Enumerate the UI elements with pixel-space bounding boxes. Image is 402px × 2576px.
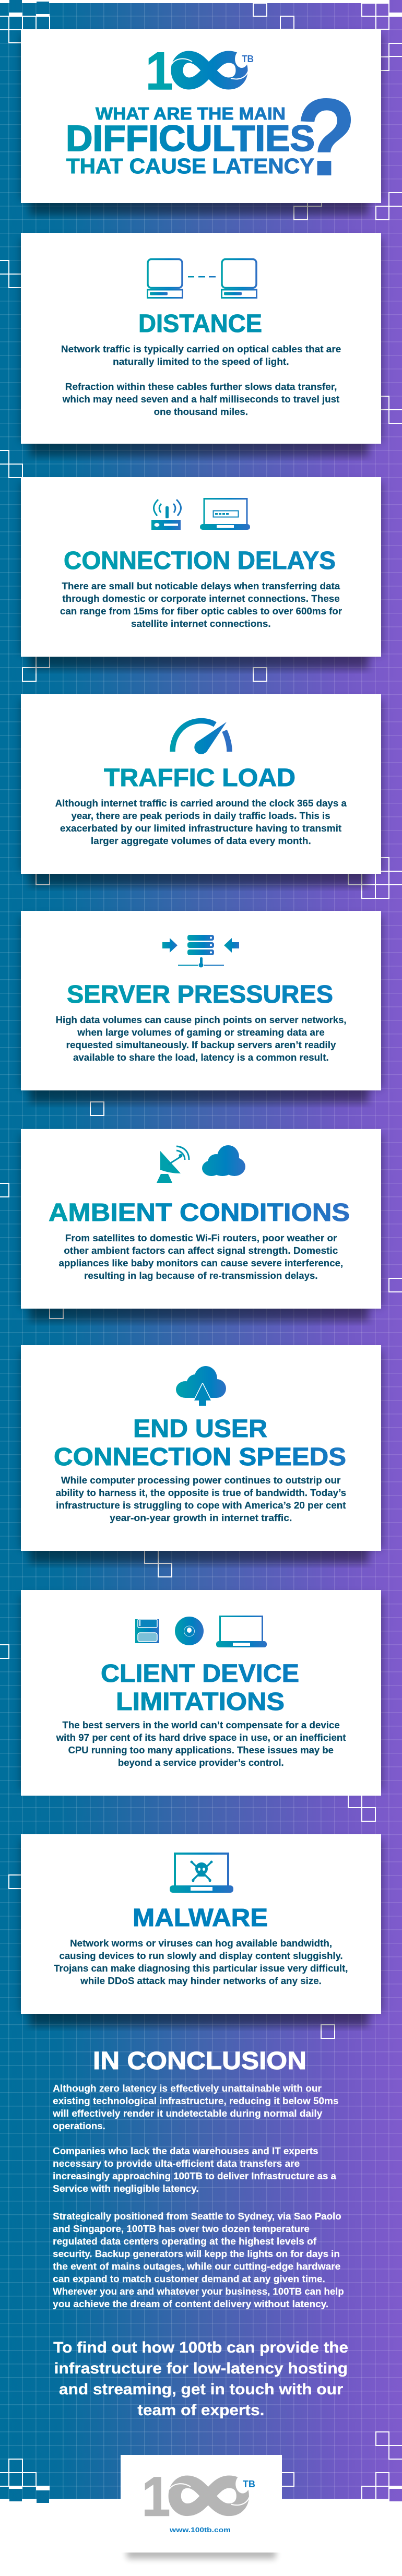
text: distance body: naturally limited to the speed of light. (113, 356, 289, 367)
panel: connection delays (21, 477, 381, 657)
text: distance body: Network traffic is typically carried on optical cables that are (61, 343, 341, 354)
text: server pressures body: High data volumes can cause pinch points on server networks, (56, 1014, 347, 1025)
text: distance body: which may need seven and a half milliseconds to travel just (62, 394, 339, 405)
text: conclusion paragraph two: necessary to provide ulta-efficient data transfers are (53, 2158, 300, 2169)
heading: main title: WHAT ARE THE MAIN (96, 104, 286, 124)
text: conclusion paragraph one: operations. (53, 2120, 105, 2131)
text: end user body: While computer processing power continues to outstrip our (61, 1475, 340, 1486)
text: conclusion paragraph three: the event of mains outages, while our cutting-edge hardware (53, 2261, 340, 2272)
text: end user body: infrastructure is struggling to cope with America’s 20 per cent (56, 1500, 346, 1511)
text: conclusion paragraph three: you achieve the dream of content delivery without latency. (53, 2298, 328, 2309)
text: ambient conditions body: appliances like baby monitors can cause severe interference, (58, 1257, 343, 1268)
panel: distance (21, 233, 381, 444)
text: conclusion paragraph one: Although zero latency is effectively unattainable with our (53, 2083, 322, 2094)
text: client device body: CPU running too many applications. These issues may be (68, 1744, 334, 1755)
text: connection delays body: can range from 15ms for fiber optic cables to over 600ms for (60, 606, 342, 616)
text: ambient conditions body: From satellites to domestic Wi-Fi routers, poor weather or (65, 1232, 337, 1243)
logo: 100TB: 1 (146, 41, 173, 101)
icon: cloud upload (176, 1366, 226, 1406)
heading: main title: DIFFICULTIES (66, 118, 315, 159)
text: connection delays body: There are small but noticable delays when transferring data (62, 580, 340, 591)
panel: traffic load (21, 694, 381, 874)
heading: connection delays: CONNECTION DELAYS (64, 547, 336, 575)
text: ambient conditions body (58, 1232, 343, 1281)
text: client device body: beyond a service provider’s control. (118, 1757, 284, 1768)
text: client device body: The best servers in the world can’t compensate for a device (62, 1719, 340, 1730)
logo: 100TB grey (142, 2465, 255, 2528)
text: distance body: Refraction within these cables further slows data transfer, (65, 381, 337, 392)
heading: server pressures: SERVER PRESSURES (67, 981, 333, 1008)
heading: malware: MALWARE (133, 1904, 268, 1932)
heading: end user connection speeds (54, 1415, 346, 1471)
panel: client device limitations (21, 1590, 381, 1796)
text: connection delays body: through domestic or corporate internet connections. These (62, 593, 340, 604)
icon: router (151, 500, 181, 530)
icon: laptop (200, 499, 250, 530)
text: connection delays body: satellite internet connections. (131, 618, 271, 629)
heading: client device limitations: CLIENT DEVICE (101, 1660, 299, 1688)
icon: compact disc (175, 1617, 204, 1645)
text: website address: www.100tb.com (169, 2526, 231, 2534)
icon: satellite dish (157, 1146, 189, 1183)
panel: server pressures (21, 911, 381, 1090)
text: distance body (61, 343, 341, 417)
logo: 100TB grey: 1 (142, 2465, 170, 2528)
text: ambient conditions body: other ambient factors can affect signal strength. Domestic (64, 1245, 338, 1256)
text: traffic load body: Although internet traffic is carried around the clock 365 days a (55, 798, 347, 809)
text: end user body: year-on-year growth in internet traffic. (110, 1512, 292, 1523)
text: conclusion paragraph three: security. Backup generators will kepp the lights on for days in (53, 2248, 340, 2259)
callout: contact call to action: team of experts. (137, 2402, 264, 2419)
panel: footer logo card (121, 2455, 282, 2553)
text: server pressures body: available to share the load, latency is a common result. (73, 1052, 329, 1063)
text: conclusion paragraph one: existing technological infrastructure, reducing it below 50ms (53, 2095, 338, 2106)
heading: end user connection speeds: CONNECTION SPEEDS (54, 1443, 346, 1471)
text: conclusion paragraph three: Strategically positioned from Seattle to Sydney, via Sao Paolo (53, 2211, 341, 2222)
text: malware body: while DDoS attack may hinder networks of any size. (80, 1975, 322, 1986)
panel: ambient conditions (21, 1129, 381, 1309)
text: conclusion paragraph two: increasingly approaching 100TB to deliver Infrastructure as a (53, 2170, 337, 2181)
text: traffic load body (55, 798, 347, 846)
heading: traffic load: TRAFFIC LOAD (104, 764, 295, 792)
panel: end user connection speeds (21, 1345, 381, 1551)
text: malware body (54, 1938, 348, 1986)
icon: cloud (202, 1145, 245, 1176)
text: traffic load body: year, there are peak periods in daily traffic loads. This is (71, 810, 330, 821)
heading: end user connection speeds: END USER (133, 1415, 267, 1443)
icon: floppy disk (135, 1619, 159, 1643)
heading: client device limitations: LIMITATIONS (116, 1688, 285, 1716)
text: conclusion paragraph two (53, 2145, 337, 2194)
logo: 100TB (146, 41, 254, 101)
text: server pressures body (56, 1014, 347, 1063)
text: conclusion paragraph three: and Singapore, 100TB has over two dozen temperature (53, 2223, 310, 2234)
text: conclusion paragraph three: Wherever you are and whatever your business, 100TB can help (53, 2286, 344, 2297)
text: malware body: Trojans can make diagnosing this particular issue very difficult, (54, 1963, 348, 1974)
text: server pressures body: requested simultaneously. If backup servers aren’t readily (66, 1039, 336, 1050)
text: conclusion paragraph three (53, 2211, 344, 2309)
icon: laptop (216, 1616, 267, 1647)
icon: infected laptop (170, 1854, 233, 1893)
callout: contact call to action (53, 2339, 348, 2419)
text: connection delays body (60, 580, 342, 629)
text: end user body (56, 1475, 346, 1523)
callout: contact call to action: infrastructure for low-latency hosting (54, 2360, 348, 2377)
heading: main title (66, 104, 315, 178)
heading: main title: THAT CAUSE LATENCY (66, 154, 314, 178)
callout: contact call to action: To find out how 100tb can provide the (53, 2339, 348, 2356)
heading: ambient conditions: AMBIENT CONDITIONS (49, 1199, 350, 1227)
text: malware body: causing devices to run slowly and display content sluggishly. (60, 1950, 343, 1961)
icon: server with arrows (162, 935, 239, 968)
text: malware body: Network worms or viruses can hog available bandwidth, (70, 1938, 332, 1949)
text: conclusion paragraph three: regulated data centers operating at the highest levels of (53, 2236, 317, 2247)
text: client device body (56, 1719, 346, 1768)
heading: in conclusion: IN CONCLUSION (93, 2047, 306, 2075)
icon: skull and crossbones (190, 1860, 213, 1882)
text: end user body: ability to harness it, the opposite is true of bandwidth. Today’s (56, 1487, 346, 1498)
text: server pressures body: when large volumes of gaming or streaming data are (77, 1027, 325, 1038)
callout: contact call to action: and streaming, get in touch with our (59, 2381, 344, 2398)
text: traffic load body: exacerbated by our limited infrastructure having to transmit (60, 823, 341, 834)
text: conclusion paragraph two: Companies who lack the data warehouses and IT experts (53, 2145, 318, 2156)
icon: question mark: ? (296, 75, 357, 199)
text: distance body: one thousand miles. (154, 406, 248, 417)
text: traffic load body: larger aggregate volumes of data every month. (91, 835, 311, 846)
text: conclusion paragraph two: Service with negligible latency. (53, 2183, 199, 2194)
icon: two computers (147, 259, 257, 298)
panel: title (21, 29, 381, 203)
heading: distance: DISTANCE (138, 310, 262, 338)
text: conclusion paragraph one (52, 2083, 338, 2131)
text: client device body: with 97 per cent of its hard drive space in use, or an inefficient (56, 1732, 346, 1743)
text: conclusion paragraph three: can expand to match customer demand at any given time. (53, 2273, 325, 2284)
logo: 100TB: TB (242, 54, 254, 64)
icon: speed gauge (172, 721, 230, 754)
text: ambient conditions body: resulting in lag because of re-transmission delays. (84, 1270, 317, 1281)
heading: client device limitations (101, 1660, 299, 1716)
logo: 100TB grey: TB (243, 2479, 255, 2490)
text: conclusion paragraph one: will effectively render it undetectable during normal daily (52, 2108, 323, 2119)
panel: malware (21, 1834, 381, 2014)
